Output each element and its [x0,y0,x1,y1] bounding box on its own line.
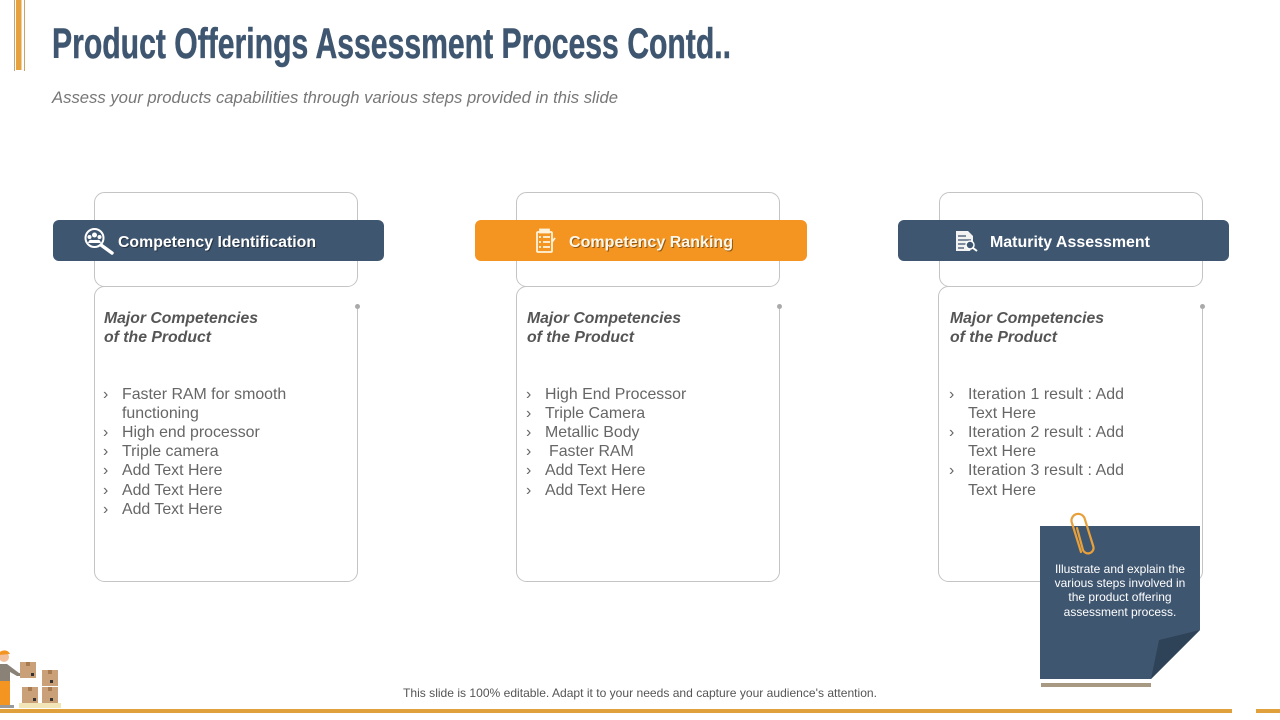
card body frame [516,286,780,582]
bullet list: Iteration 1 result : Add [968,386,1124,403]
note sheet [1040,526,1200,679]
icon: paper clip [1071,514,1094,553]
card heading [104,310,258,346]
note text: Illustrate and explain the [1055,562,1185,576]
bullet list: Faster RAM [549,443,634,460]
bullet list: Triple camera [122,443,219,460]
callout: sticky note [1040,514,1200,687]
banner [898,220,1229,261]
worker [0,650,25,708]
card body frame [938,286,1202,582]
card heading: of the Product [527,329,635,346]
illustration: warehouse worker with boxes [0,650,61,708]
bullet list [103,386,286,518]
note text [1055,562,1185,619]
bullet list: › [103,501,108,518]
title: Product Offerings Assessment Process Contd.. [52,20,731,68]
bullet list: › [949,424,954,441]
bullet list: › [103,386,108,403]
card body frame [94,286,358,582]
panel: competency ranking [475,192,807,582]
panel: competency identification [53,192,384,582]
bullet list: Add Text Here [545,462,646,479]
card top frame [516,192,780,286]
card heading: Major Competencies [527,310,681,327]
header accent bars [14,0,25,71]
bullet list: High end processor [122,424,261,441]
banner label: Competency Ranking [569,234,733,251]
bullet list: Add Text Here [122,482,223,499]
card heading [527,310,681,346]
card heading: of the Product [104,329,212,346]
banner [475,220,807,261]
icon: clipboard checklist [537,230,555,252]
bullet list: › [103,482,108,499]
note text: the product offering [1068,590,1172,604]
banner [53,220,384,261]
card heading: of the Product [950,329,1058,346]
bullet list: Add Text Here [545,482,646,499]
card heading: Major Competencies [950,310,1104,327]
card top frame [940,192,1202,286]
bullet list: Text Here [968,482,1036,499]
bullet list: Text Here [968,405,1036,422]
bullet list: Add Text Here [122,462,223,479]
bullet list: High End Processor [545,386,687,403]
card heading: Major Competencies [104,310,258,327]
bullet list: › [103,462,108,479]
icon: magnifier with people [86,229,112,253]
bullet list: › [526,424,531,441]
bullet list: › [949,462,954,479]
card heading [950,310,1104,346]
bullet list: › [526,443,531,460]
note text: various steps involved in [1055,576,1185,590]
bullet list: › [526,482,531,499]
bullet list: functioning [122,405,199,422]
note shadow [1041,683,1151,687]
bullet list: Add Text Here [122,501,223,518]
bullet list: › [526,405,531,422]
panel: maturity assessment [898,192,1229,582]
bullet list: Faster RAM for smooth [122,386,286,403]
bullet list: Text Here [968,443,1036,460]
icon: document search [956,231,977,251]
note folded corner [1151,630,1200,679]
note text: assessment process. [1064,605,1176,619]
bullet list: › [526,462,531,479]
card top frame [94,192,358,286]
card marker dot [777,304,782,309]
card marker dot [1200,304,1205,309]
bullet list: › [103,424,108,441]
bullet list [949,386,1124,499]
bullet list: Triple Camera [545,405,645,422]
banner label: Maturity Assessment [990,234,1151,251]
cardboard boxes [20,662,58,703]
bullet list: Iteration 3 result : Add [968,462,1124,479]
bullet list: Iteration 2 result : Add [968,424,1124,441]
bullet list: › [526,386,531,403]
bullet list: Metallic Body [545,424,640,441]
pallet [19,703,61,708]
card marker dot [355,304,360,309]
bullet list: › [103,443,108,460]
bullet list [526,386,687,499]
subtitle: Assess your products capabilities through various steps provided in this slide [51,88,618,107]
bullet list: › [949,386,954,403]
banner label: Competency Identification [118,234,316,251]
footer note: This slide is 100% editable. Adapt it to your needs and capture your audience's attention. [403,686,877,700]
footer bar [0,709,1280,713]
